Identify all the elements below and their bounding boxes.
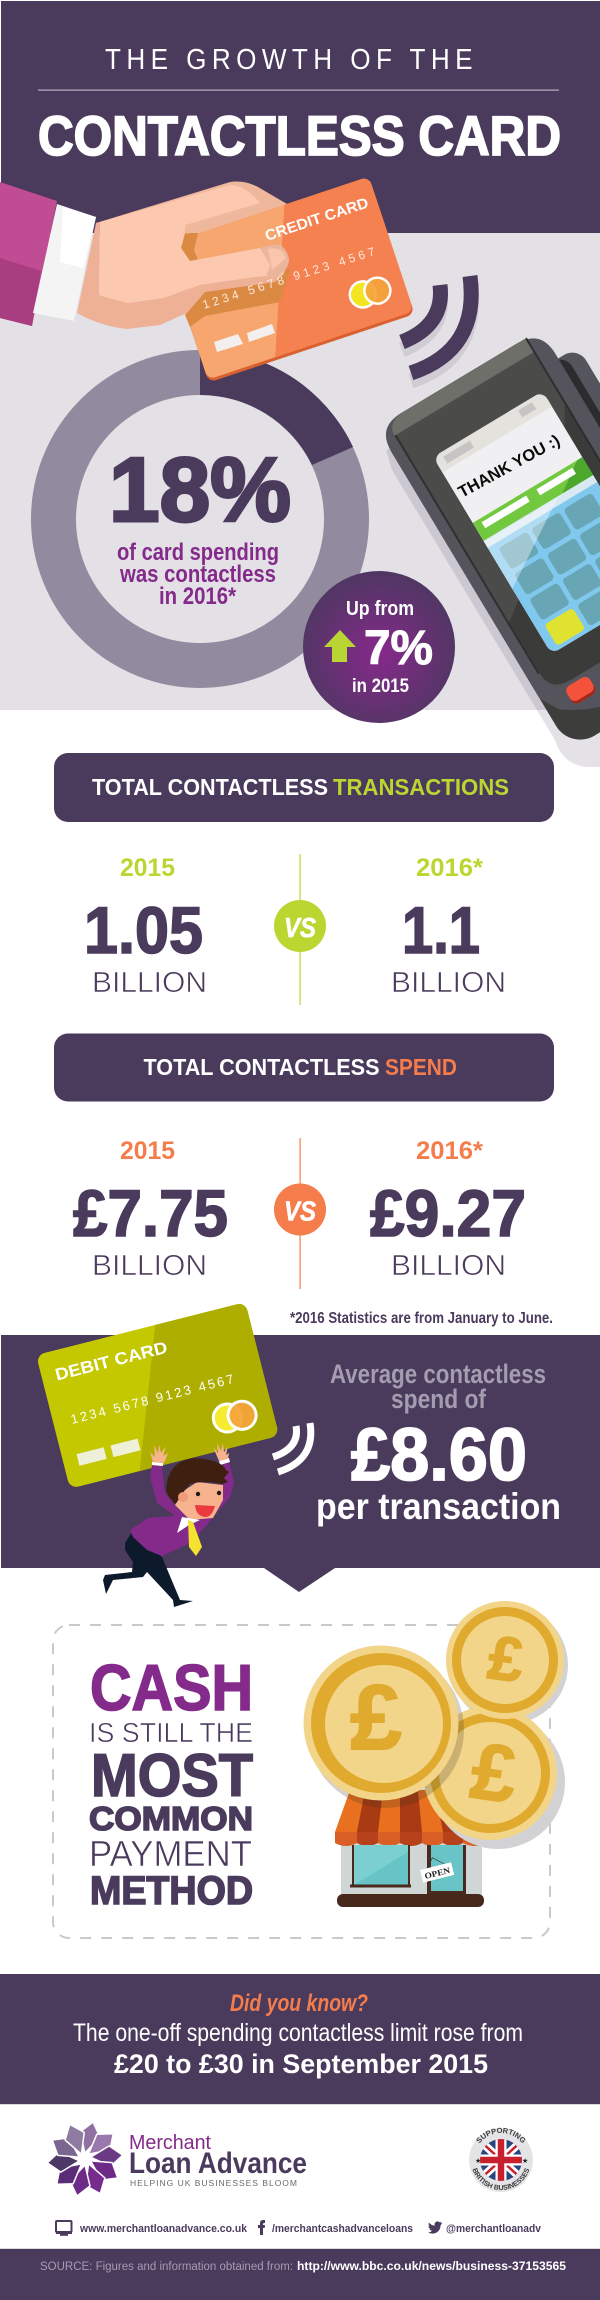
text block: cash is still the most common payment method: COMMON: [89, 1801, 253, 1838]
2016 transactions: BILLION: [391, 967, 506, 999]
text block: cash is still the most common payment method: CASH: [90, 1651, 253, 1724]
base: [337, 1894, 484, 1907]
icon: pound coins: [304, 1601, 568, 1849]
contact row: /merchantcashadvanceloans: [272, 2223, 413, 2235]
stat badge: up from 7%: 7%: [364, 622, 433, 675]
hand back: [96, 182, 290, 240]
tie: [188, 1520, 202, 1556]
awning: [335, 1790, 487, 1846]
section heading: total contactless spend: SPEND: [385, 1054, 457, 1080]
panel: hero background: [0, 233, 600, 710]
logo text: [129, 2132, 307, 2188]
legs: [103, 1532, 193, 1607]
stat caption: [117, 539, 279, 610]
icon: monitor: [56, 2221, 72, 2236]
hands: [150, 1443, 229, 1463]
thumb shadow on card: [185, 268, 291, 327]
badge: supporting british businesses: ★: [522, 2157, 528, 2165]
stat: average spend text: [316, 1359, 561, 1527]
stat: average spend text: Average contactless: [330, 1359, 546, 1389]
vs badge: [274, 1184, 326, 1236]
logo text: Loan Advance: [129, 2147, 307, 2180]
coin: top right: £: [484, 1623, 528, 1696]
badge: supporting british businesses: BRITISH BUSINESSES: [472, 2168, 529, 2190]
donut chart: 18 percent: [54, 350, 353, 666]
section heading: total contactless transactions: TRANSACTIONS: [333, 774, 509, 800]
illustration: debit card: [36, 1302, 279, 1489]
credit card: [163, 177, 415, 383]
section heading: total contactless spend: [54, 1034, 554, 1102]
illustration: shop: [335, 1790, 487, 1907]
terminal text: thank you: THANK YOU :): [455, 432, 563, 502]
2015 spend: BILLION: [92, 1250, 207, 1282]
illustration: debit card: 1234 5678 9123 4567: [69, 1371, 237, 1427]
contact row: [56, 2220, 542, 2236]
window: [350, 1845, 411, 1888]
coin shadows: [431, 1715, 565, 1849]
2015 transactions: 1.05: [84, 893, 203, 967]
section heading: total contactless transactions: [54, 753, 554, 822]
stat caption: in 2016*: [159, 583, 237, 610]
text block: cash is still the most common payment method: METHOD: [90, 1869, 253, 1913]
sleeve: [0, 182, 57, 326]
logo text: HELPING UK BUSINESSES BLOOM: [130, 2178, 297, 2188]
2016 transactions: 2016*: [416, 854, 483, 882]
door: [427, 1845, 466, 1895]
text block: cash is still the most common payment method: PAYMENT: [89, 1833, 252, 1874]
coin: large: £: [350, 1667, 402, 1769]
footer: source: SOURCE: Figures and information obtained from:: [40, 2261, 293, 2273]
section heading: total contactless spend: TOTAL CONTACTLESS: [144, 1054, 380, 1080]
stat badge: up from 7%: in 2015: [352, 676, 409, 697]
text block: cash is still the most common payment method: MOST: [91, 1742, 253, 1809]
cuffs: [152, 1458, 230, 1466]
cuff: [33, 204, 96, 321]
coin shadow on lower coin and awning: [308, 1652, 464, 1808]
icon: white contactless waves: [273, 1423, 311, 1472]
badge: supporting british businesses: ★: [475, 2157, 481, 2165]
panel: did you know: [0, 1974, 600, 2104]
panel: cash dashed box: [53, 1625, 550, 1938]
coin: top right: [446, 1601, 564, 1719]
text block: cash is still the most common payment method: IS STILL THE: [89, 1717, 253, 1748]
panel: did you know: £20 to £30 in September 2015: [114, 2049, 488, 2079]
section heading: total contactless transactions: TOTAL CONTACTLESS: [92, 774, 328, 800]
comparison: spend: [73, 1137, 526, 1289]
illustration: hand holding credit card: [0, 177, 415, 383]
footnote: *2016 Statistics are from January to June.: [290, 1310, 553, 1327]
2015 transactions: 2015: [120, 854, 175, 882]
coin: lower right: £: [466, 1726, 522, 1820]
credit card: CREDIT CARD: [263, 194, 371, 245]
2016 spend: BILLION: [391, 1250, 506, 1282]
header band: [1, 1, 600, 233]
open sign: [418, 1854, 454, 1883]
panel: average spend band: [1, 1335, 600, 1592]
2015 spend: 2015: [120, 1137, 175, 1165]
vs badge: VS: [284, 912, 316, 943]
thumbnail: [260, 245, 289, 277]
collar: [177, 1517, 200, 1533]
stat: 18%: 18%: [109, 440, 291, 541]
2016 spend: 2016*: [416, 1137, 483, 1165]
2015 spend: £7.75: [73, 1176, 228, 1250]
open sign: OPEN: [423, 1865, 452, 1881]
stat: average spend text: spend of: [391, 1384, 487, 1414]
title: the growth of the: THE GROWTH OF THE: [105, 44, 478, 76]
vs badge: [274, 900, 326, 952]
logo: merchant loan advance flower: [45, 2120, 125, 2198]
head: [166, 1458, 229, 1520]
footer: source: http://www.bbc.co.uk/news/business-37153565: [297, 2261, 567, 2273]
button: red: [564, 675, 597, 706]
card signature bars: [214, 324, 275, 352]
panel: did you know: Did you know?: [230, 1990, 368, 2017]
panel: did you know: The one-off spending contactless limit rose from: [73, 2019, 523, 2047]
stat badge: up from 7%: Up from: [346, 598, 414, 620]
2016 transactions: [391, 854, 506, 999]
icon: card terminal: [386, 338, 600, 740]
icon: contactless waves: [402, 276, 471, 381]
comparison: transactions: [84, 854, 506, 1005]
stat caption: of card spending: [117, 539, 279, 566]
coin: large: [304, 1646, 458, 1800]
stat: average spend text: per transaction: [316, 1486, 561, 1527]
2015 transactions: BILLION: [92, 967, 207, 999]
card number: 1234 5678 9123 4567: [201, 244, 378, 312]
icon: facebook: [258, 2220, 265, 2235]
logo text: Merchant: [129, 2132, 211, 2154]
fingers and thumb: [181, 233, 198, 261]
illustration: debit card: DEBIT CARD: [53, 1338, 169, 1385]
text block: cash is still the most common payment method: [89, 1651, 253, 1913]
stat badge: up from 7%: [303, 571, 455, 723]
footer: source: [0, 2248, 600, 2300]
stat caption: was contactless: [119, 561, 276, 588]
2016 spend: £9.27: [370, 1176, 526, 1250]
stat: average spend text: £8.60: [351, 1413, 527, 1496]
badge: supporting british businesses: [469, 2128, 533, 2192]
2015 spend: [73, 1137, 228, 1282]
terminal shadow: [386, 420, 600, 767]
icon: up arrow: [324, 630, 356, 662]
illustration: man carrying card: [103, 1443, 234, 1607]
vs badge: VS: [284, 1196, 316, 1226]
2015 transactions: [84, 854, 207, 999]
terminal screen: [433, 391, 600, 654]
icon: twitter: [428, 2221, 442, 2234]
body: [130, 1462, 234, 1556]
2016 transactions: 1.1: [402, 893, 480, 967]
2016 spend: [370, 1137, 526, 1282]
contact row: @merchantloanadv: [446, 2223, 542, 2235]
coin: lower right: [423, 1706, 557, 1840]
contact row: www.merchantloanadvance.co.uk: [79, 2223, 248, 2235]
badge: supporting british businesses: SUPPORTING: [476, 2128, 526, 2143]
